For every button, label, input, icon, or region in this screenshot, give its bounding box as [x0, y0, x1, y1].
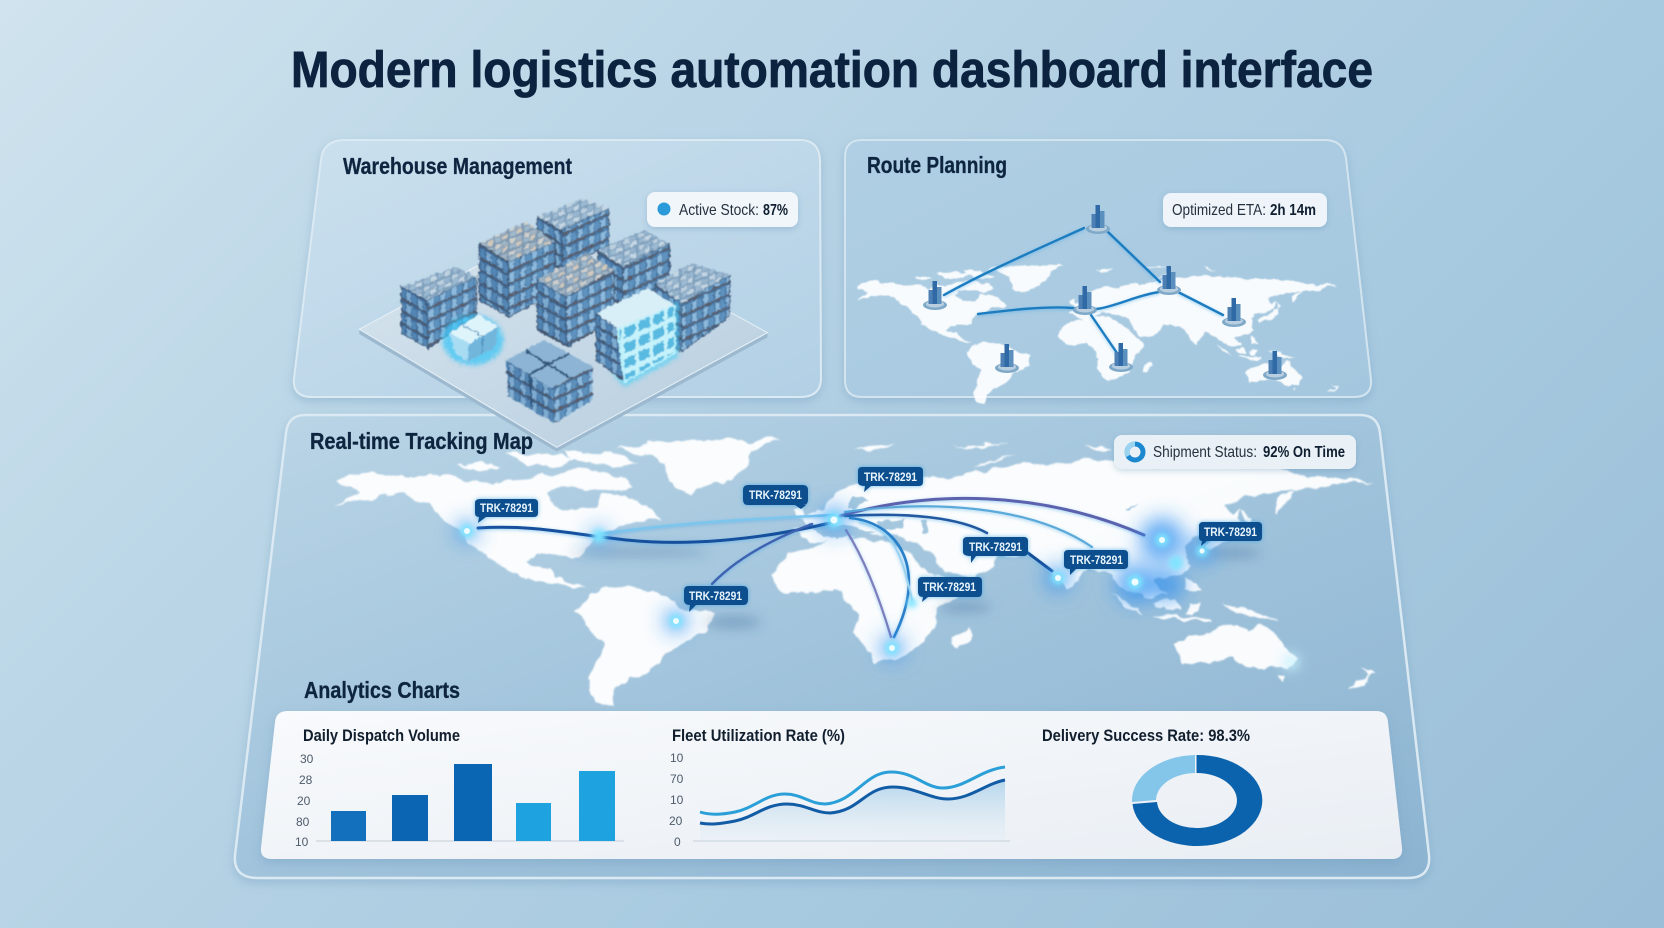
- route network lines: [944, 228, 1223, 353]
- inland seas: [809, 495, 1139, 537]
- tracking label 5: TRK-78291: [969, 540, 1022, 554]
- panel: warehouse management: [294, 140, 821, 397]
- chart: daily dispatch volume: 30: [300, 752, 314, 766]
- tracking label 3: TRK-78291: [689, 589, 742, 603]
- callout: active stock: Active Stock:: [679, 202, 759, 219]
- callout: shipment status: Shipment Status:: [1153, 444, 1257, 461]
- chart: delivery success rate donut: [1042, 726, 1262, 846]
- world map: tracking: [337, 440, 1375, 705]
- tracking label 8: [1199, 522, 1262, 546]
- callout: shipment status: [1114, 435, 1356, 469]
- panel: route planning: [845, 140, 1371, 403]
- chart: fleet utilization rate: [669, 726, 1010, 849]
- chart: delivery success rate donut: Delivery Success Rate: 98.3%: [1042, 726, 1250, 745]
- icon: status ring: [1127, 444, 1143, 460]
- glowing pallet: [442, 315, 503, 365]
- tracking label 4: TRK-78291: [864, 470, 917, 484]
- chart: daily dispatch volume: 10: [295, 835, 309, 849]
- tracking label 2: [743, 485, 808, 509]
- rack: back left: [479, 222, 555, 317]
- glowing rack: [596, 288, 678, 387]
- tracking label 1: [475, 499, 538, 523]
- chart: daily dispatch volume: 28: [299, 773, 313, 787]
- rack: back centre: [598, 230, 669, 307]
- glowing shipment nodes: [456, 506, 1299, 670]
- tracking label 7: TRK-78291: [923, 580, 976, 594]
- chart: daily dispatch volume: 80: [296, 815, 310, 829]
- callout: optimized ETA: Optimized ETA:: [1172, 202, 1266, 219]
- isometric warehouse illustration: [359, 198, 767, 452]
- chart: daily dispatch volume: 20: [297, 794, 311, 808]
- panel: analytics card: [261, 711, 1402, 859]
- tracking label 2: TRK-78291: [749, 488, 802, 502]
- shipment routes: [478, 498, 1144, 637]
- chart: fleet utilization rate: Fleet Utilization Rate (%): [672, 726, 845, 745]
- chart: fleet utilization rate: 0: [674, 835, 681, 849]
- callout: shipment status: 92% On Time: [1263, 444, 1345, 461]
- tracking label 4: [858, 467, 923, 492]
- chart: fleet utilization rate: 20: [669, 814, 683, 828]
- rack: centre: [537, 253, 614, 347]
- callout: active stock: [647, 192, 798, 227]
- platform: [359, 220, 767, 452]
- world map: route planning: [857, 265, 1338, 403]
- chart: daily dispatch volume: Daily Dispatch Volume: [303, 726, 460, 745]
- rack: back right: [537, 198, 609, 270]
- icon: stock badge: [658, 202, 670, 216]
- tracking label 5: [963, 537, 1028, 563]
- chart: fleet utilization rate: 70: [670, 772, 684, 786]
- callout: optimized ETA: [1163, 193, 1327, 227]
- racks and pallets: [401, 198, 729, 423]
- heading: warehouse management: Warehouse Management: [343, 153, 572, 179]
- title: Modern logistics automation dashboard interface: [291, 41, 1373, 98]
- chart: daily dispatch volume: [295, 726, 624, 849]
- city icons: [923, 205, 1287, 380]
- tracking label 8: TRK-78291: [1204, 525, 1257, 539]
- chart: fleet utilization rate: 10: [670, 751, 684, 765]
- heading: analytics charts: Analytics Charts: [304, 677, 460, 703]
- rack: left: [401, 267, 476, 348]
- rack: right: [655, 263, 729, 352]
- tracking label 3: [684, 586, 748, 612]
- tracking label 6: [1064, 550, 1128, 575]
- tracking label 1: TRK-78291: [480, 501, 533, 515]
- label shadows: [570, 548, 1261, 628]
- callout: active stock: 87%: [763, 202, 788, 219]
- heading: route planning: Route Planning: [867, 152, 1007, 178]
- heading: real-time tracking map: Real-time Tracking Map: [310, 428, 533, 454]
- chart: fleet utilization rate: 10: [670, 793, 684, 807]
- stacked pallet: [506, 340, 592, 423]
- tracking label 7: [918, 577, 982, 602]
- tracking label 6: TRK-78291: [1070, 553, 1123, 567]
- callout: optimized ETA: 2h 14m: [1270, 202, 1316, 219]
- panel: real-time tracking map: [235, 415, 1429, 878]
